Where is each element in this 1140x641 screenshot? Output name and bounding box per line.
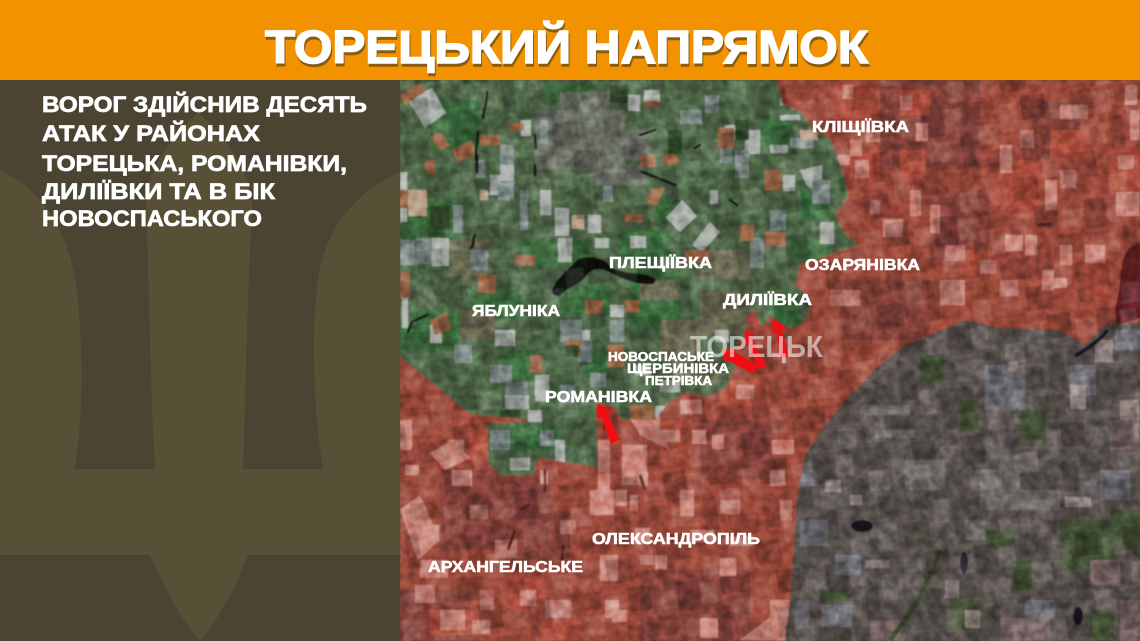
left panel: [0, 91, 400, 640]
summary text: ДИЛІЇВКИ ТА В БІК: [42, 179, 276, 204]
label: Oleksandropil: ОЛЕКСАНДРОПІЛЬ: [592, 531, 760, 548]
summary text: ВОРОГ ЗДІЙСНИВ ДЕСЯТЬ: [42, 92, 367, 117]
Toretsk sector border: [775, 80, 857, 260]
adjacent occupied area: [780, 320, 1140, 641]
summary text: НОВОСПАСЬКОГО: [42, 206, 262, 231]
arrow: Novospaske: [723, 349, 757, 373]
label: Klishchiivka: КЛІЩІЇВКА: [812, 118, 910, 136]
arrow: Diliivka: [773, 319, 788, 357]
label: Yablunivka: ЯБЛУНІКА: [472, 303, 560, 320]
place names: [428, 118, 920, 576]
summary text: АТАК У РАЙОНАХ: [42, 121, 260, 146]
trident watermark: [0, 112, 400, 641]
label: Ozarianivka: ОЗАРЯНІВКА: [805, 257, 920, 274]
field mosaic texture: [400, 80, 1140, 641]
occupied territory: [400, 80, 1140, 641]
map panel: [400, 80, 1140, 641]
town: [535, 92, 650, 185]
label: Romanivka: РОМАНІВКА: [545, 389, 652, 406]
label: Petrivka: ПЕТРІВКА: [645, 374, 712, 388]
lake: [552, 257, 656, 296]
title: ТОРЕЦЬКИЙ НАПРЯМОК: [265, 21, 869, 73]
satellite imagery: [400, 80, 1140, 641]
label: Diliivka: ДИЛІЇВКА: [723, 291, 813, 309]
dark red lake: [1115, 243, 1140, 325]
Ukrainian-held territory: [400, 80, 860, 480]
arrow: Romanivka: [597, 404, 619, 443]
summary text: [42, 92, 367, 231]
arrow: Shcherbynivka: [745, 331, 766, 369]
label: Shcherbynivka: ЩЕРБИНІВКА: [627, 360, 729, 376]
label: Arkhanhelske: АРХАНГЕЛЬСЬКЕ: [428, 559, 583, 576]
ponds: [408, 92, 737, 332]
label: Pleshchiivka: ПЛЕЩІЇВКА: [609, 254, 713, 272]
noise texture: [400, 80, 1140, 641]
arrows: [597, 319, 788, 443]
header banner: [0, 0, 1140, 80]
label: Toretsk: ТОРЕЦЬК: [690, 329, 823, 364]
summary text: ТОРЕЦЬКА, РОМАНІВКИ,: [42, 151, 347, 176]
label: Novospaske: НОВОСПАСЬКЕ: [608, 349, 714, 364]
